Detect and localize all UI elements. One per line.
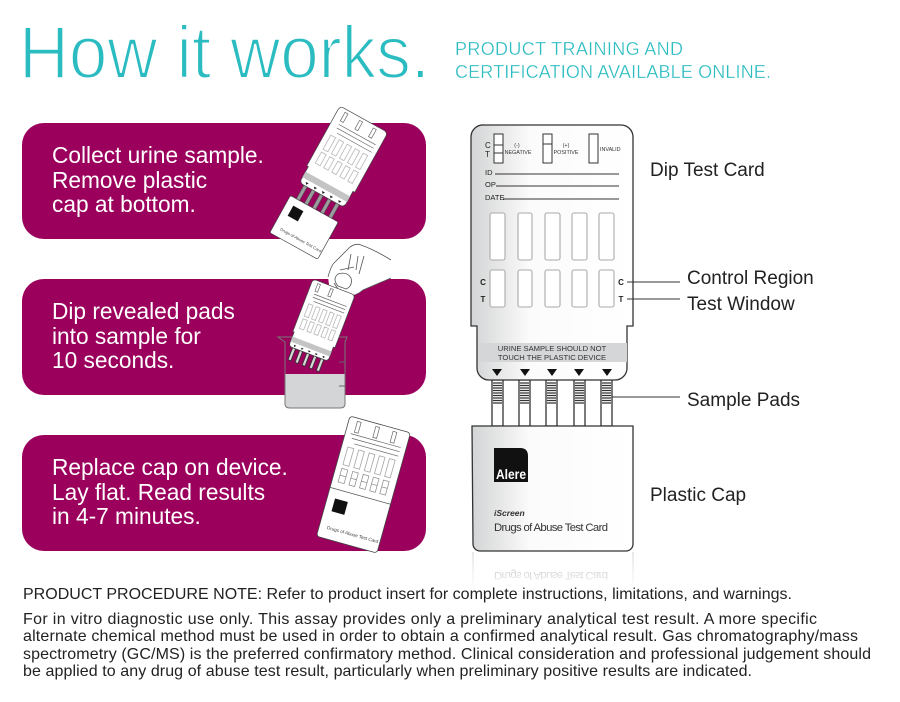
panel: step 3 replace cap: Replace cap on device.	[52, 454, 288, 480]
arrows	[492, 369, 612, 376]
label: control region: Control Region	[687, 268, 814, 289]
panel: step 1 collect sample: Remove plastic	[52, 167, 207, 193]
icon: test card with cap removed	[270, 106, 388, 259]
cap reflection: Drugs of Abuse Test Card	[494, 569, 608, 581]
panel: step 1 collect sample: Collect urine sample.	[52, 142, 264, 168]
disclaimer text: For in vitro diagnostic use only. This assay provides only a preliminary analytical test result. A more specific	[23, 611, 817, 628]
diagram: sample pads	[492, 380, 612, 426]
icon: beaker with sample liquid	[278, 337, 347, 408]
procedure note: PRODUCT PROCEDURE NOTE: Refer to product insert for complete instructions, limitations, and warnings.	[23, 586, 792, 603]
result key: T	[485, 150, 490, 159]
subtitle: PRODUCT TRAINING AND	[455, 39, 683, 59]
ID fields	[485, 168, 619, 202]
label: dip test card: Dip Test Card	[650, 160, 765, 181]
panel: step 1 collect sample: cap at bottom.	[52, 191, 196, 217]
disclaimer text: be applied to any drug of abuse test result, particularly when preliminary positive results are indicated.	[23, 663, 752, 680]
result key: C	[485, 141, 491, 150]
warning band	[478, 343, 627, 362]
icon: capped test card lying flat	[316, 416, 410, 553]
result key: POSITIVE	[554, 150, 579, 156]
panel: step 3 replace cap: Lay flat. Read results	[52, 479, 265, 505]
panel: step 2 dip pads	[22, 279, 426, 395]
diagram: plastic cap	[472, 426, 633, 551]
disclaimer text	[23, 611, 871, 680]
subtitle	[455, 39, 771, 82]
result key: (+)	[563, 143, 570, 149]
icon: capped test card lying flat: Drugs of Abuse Test Card	[326, 525, 379, 544]
result key: NEGATIVE	[505, 150, 532, 156]
C and T marks: T	[481, 295, 486, 304]
result key: (-)	[514, 143, 520, 149]
disclaimer text: alternate chemical method must be used in order to obtain a confirmed analytical result. Gas chromatography/mass	[23, 628, 858, 645]
result key	[485, 134, 621, 163]
C and T marks: C	[618, 278, 624, 287]
ID fields: ID	[485, 168, 493, 177]
panel: step 2 dip pads: 10 seconds.	[52, 347, 174, 373]
product name: Drugs of Abuse Test Card	[494, 522, 608, 534]
icon: hand holding card in sample	[283, 244, 391, 374]
C and T marks	[480, 278, 624, 304]
lower test windows	[490, 270, 614, 307]
icon: test card with cap removed: Drugs of Abuse Test Card	[279, 227, 322, 253]
C and T marks: T	[619, 295, 624, 304]
label: plastic cap: Plastic Cap	[650, 485, 746, 506]
subtitle: CERTIFICATION AVAILABLE ONLINE.	[455, 62, 771, 82]
logo	[494, 448, 528, 482]
ID fields: OP	[485, 180, 496, 189]
title: How it works.	[19, 11, 430, 94]
label: test window: Test Window	[687, 294, 795, 315]
panel: step 2 dip pads: Dip revealed pads	[52, 298, 235, 324]
warning band: URINE SAMPLE SHOULD NOT	[498, 344, 607, 353]
ID fields: DATE	[485, 193, 504, 202]
product name	[494, 508, 608, 534]
panel: step 3 replace cap: in 4-7 minutes.	[52, 503, 201, 529]
panel: step 3 replace cap	[22, 435, 426, 551]
product name: iScreen	[494, 508, 525, 518]
cap reflection	[470, 552, 636, 590]
logo: Alere	[496, 467, 526, 482]
label: sample pads: Sample Pads	[687, 390, 800, 411]
panel: step 2 dip pads: into sample for	[52, 323, 201, 349]
result key: INVALID	[600, 147, 621, 153]
C and T marks: C	[480, 278, 486, 287]
panel: step 1 collect sample	[22, 123, 426, 239]
upper windows	[490, 213, 614, 260]
warning band: TOUCH THE PLASTIC DEVICE	[498, 353, 606, 362]
disclaimer text: spectrometry (GC/MS) is the preferred confirmatory method. Clinical consideration and professional judgement should	[23, 646, 871, 663]
diagram: dip test card body	[471, 125, 633, 380]
